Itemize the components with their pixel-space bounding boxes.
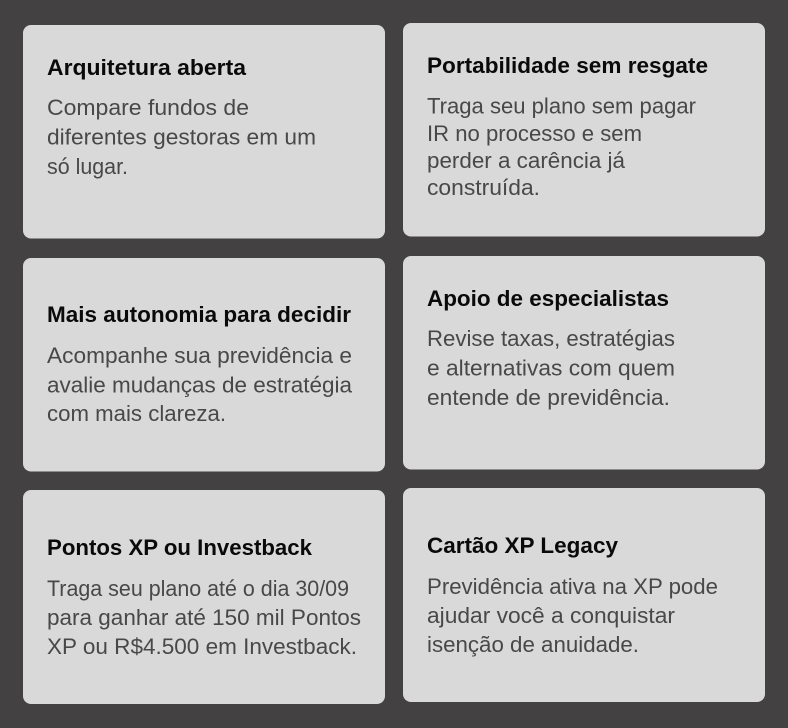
text block: Arquitetura aberta body: Compare fundos de [47, 95, 249, 120]
text block: Pontos XP body: Traga seu plano até o dia 30/09 [47, 576, 349, 601]
text block: Mais autonomia body: com mais clareza. [47, 401, 226, 426]
text block: Portabilidade body [427, 94, 696, 200]
heading: Portabilidade sem resgate: Portabilidade sem resgate [427, 53, 708, 78]
text block: Pontos XP body [47, 576, 361, 659]
text block: Mais autonomia body: Acompanhe sua previdência e [47, 343, 352, 368]
text block: Portabilidade body: IR no processo e sem [427, 121, 642, 146]
panel: Arquitetura aberta [23, 25, 385, 238]
text block: Cartão XP Legacy body [427, 574, 718, 657]
text block: Pontos XP body: para ganhar até 150 mil Pontos [47, 605, 361, 630]
panel: Apoio de especialistas [403, 256, 765, 470]
panel: Mais autonomia para decidir [23, 258, 385, 472]
heading: Mais autonomia para decidir: Mais autonomia para decidir [47, 302, 351, 327]
text block: Portabilidade body: perder a carência já [427, 148, 625, 173]
panel: Portabilidade sem resgate [403, 23, 765, 236]
text block: Arquitetura aberta body [47, 95, 316, 179]
text block: Apoio body: entende de previdência. [427, 385, 670, 410]
text block: Arquitetura aberta body: diferentes gestoras em um [47, 124, 316, 150]
heading: Apoio de especialistas: Apoio de especialistas [427, 286, 669, 311]
text block: Cartão XP Legacy body: ajudar você a conquistar [427, 603, 676, 628]
heading: Pontos XP ou Investback: Pontos XP ou Investback [47, 535, 313, 560]
heading: Cartão XP Legacy: Cartão XP Legacy [427, 533, 619, 558]
text block: Arquitetura aberta body: só lugar. [47, 154, 128, 179]
heading: Arquitetura aberta: Arquitetura aberta [47, 55, 247, 80]
text block: Portabilidade body: Traga seu plano sem pagar [427, 94, 696, 118]
panel: Pontos XP ou Investback [23, 490, 385, 704]
panel: Cartão XP Legacy [403, 488, 765, 702]
text block: Cartão XP Legacy body: Previdência ativa na XP pode [427, 574, 718, 599]
text block: Apoio body: e alternativas com quem [427, 356, 675, 380]
text block: Cartão XP Legacy body: isenção de anuidade. [427, 632, 639, 657]
text block: Apoio body [427, 326, 675, 410]
text block: Mais autonomia body [47, 343, 352, 426]
text block: Pontos XP body: XP ou R$4.500 em Investback. [47, 634, 357, 659]
text block: Mais autonomia body: avalie mudanças de estratégia [47, 372, 352, 398]
text block: Portabilidade body: construída. [427, 175, 540, 200]
text block: Apoio body: Revise taxas, estratégias [427, 326, 675, 351]
